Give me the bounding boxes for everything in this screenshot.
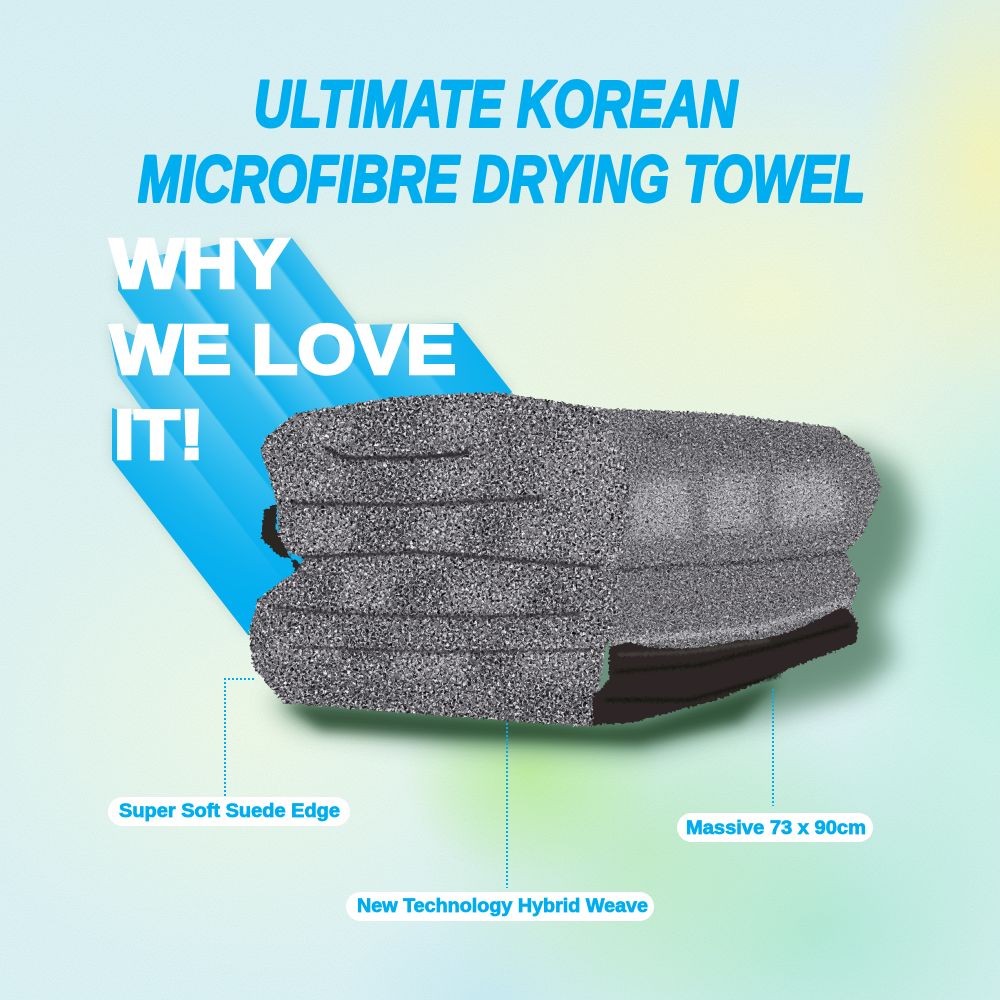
heading: why we love it: WE LOVE <box>110 310 456 388</box>
towel front face with weave <box>245 385 635 730</box>
callout line: size <box>772 689 774 806</box>
dark suede edge bottom right <box>593 607 858 725</box>
label: new technology hybrid weave: New Technology Hybrid Weave <box>357 895 648 917</box>
heading: why we love it <box>110 224 456 474</box>
heading: why we love it: WHY <box>110 224 289 302</box>
label: massive 73 x 90cm <box>677 813 873 842</box>
label: super soft suede edge <box>108 797 350 826</box>
label: massive 73 x 90cm: Massive 73 x 90cm <box>686 817 866 839</box>
callout line: suede edge <box>225 679 254 796</box>
heading: why we love it: IT! <box>114 396 204 474</box>
callout line: hybrid weave <box>506 723 508 888</box>
folded grey microfibre towel <box>245 385 890 730</box>
long-shadow blue stripes behind text <box>108 238 512 635</box>
towel drop shadow <box>270 440 916 752</box>
headline <box>138 66 865 216</box>
headline: ULTIMATE KOREAN <box>254 66 738 140</box>
towel fold lines <box>275 447 600 652</box>
towel right side face <box>600 407 882 649</box>
label: super soft suede edge: Super Soft Suede Edge <box>119 800 340 822</box>
dark suede edge left tab <box>261 504 312 574</box>
